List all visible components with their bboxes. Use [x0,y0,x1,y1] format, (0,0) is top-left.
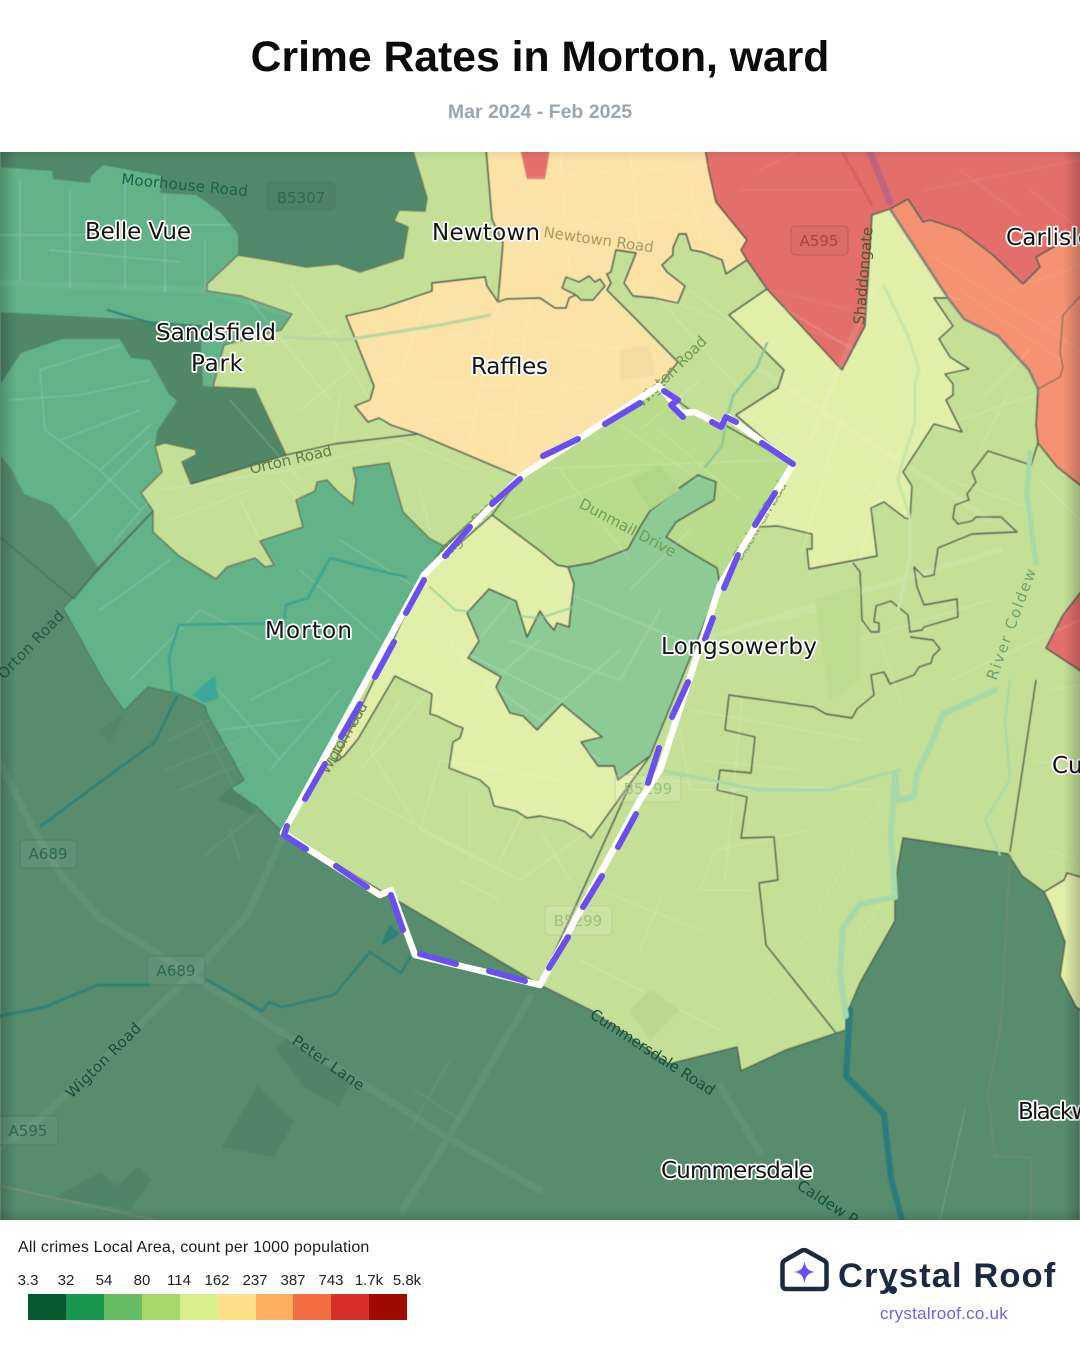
road names: Orton Road [248,441,334,478]
area polygons [0,148,1080,1224]
ward boundary: Morton [283,386,793,985]
place names: Sandsfield [156,320,276,346]
rivers and water [0,152,1038,1220]
area: ward centre mid green [467,475,720,780]
road shield: A689 west: A689 [29,845,67,863]
area: Belle Vue [0,165,292,387]
road shield: A689 central [147,956,205,985]
place names: Park [191,351,244,377]
logo wordmark: Crystal Roof [838,1257,1056,1295]
legend scale labels: 387 [280,1272,306,1289]
subtitle: date range: Mar 2024 - Feb 2025 [448,101,632,123]
small green island [562,276,605,300]
road names: Moorhouse Road [121,170,249,200]
legend scale labels [18,1272,422,1289]
area: city centre red [705,148,1080,370]
road names: Wigton Road [62,1019,145,1102]
legend scale labels: 32 [58,1272,74,1289]
road names: Shaddongate [850,226,877,325]
notch: red area top [520,148,550,179]
road names: Wigton Road [436,492,503,563]
internal boundaries [0,434,1038,1033]
legend scale labels: 114 [167,1272,191,1289]
area: pale yellow central [729,209,969,569]
area: west Morton [0,339,177,568]
road names: River Coldew [983,566,1040,682]
website link text: crystalroof.co.uk [880,1304,1008,1323]
darker land patches [55,345,860,1210]
legend scale labels: 3.3 [18,1272,38,1289]
legend scale labels: 1.7k [355,1272,383,1289]
place names: Belle Vue [85,219,191,245]
place names [85,219,1080,1184]
place names: Cummersdale [661,1158,813,1184]
legend scale labels: 5.8k [393,1272,421,1289]
road shield: A595 north [791,226,848,255]
place names: Raffles [471,354,548,380]
area: ward north [492,386,793,585]
icon: house with star [780,1248,829,1292]
road shield: B5299 north: B5299 [624,780,672,798]
road shield: A689 central: A689 [157,962,195,980]
road names: Cummersdale Road [587,1005,718,1099]
road names: Wigton Road [632,332,711,411]
logo y-tail dot [889,1286,897,1294]
legend title: All crimes Local Area, count per 1000 population [18,1239,369,1256]
road shield: B5307 [267,182,335,210]
road names [0,170,1040,1244]
place names: Newtown [432,220,540,246]
road shield: A689 west [20,840,77,868]
area: Newtown and Raffles [346,148,747,477]
road names: Newtown Road [542,223,655,256]
area: Sandsfield Park [141,148,520,579]
area: pale right edge [1044,873,1080,1012]
road shield: A595 south: A595 [9,1122,47,1140]
place names: Longsowerby [661,634,817,660]
legend colour bar [28,1294,407,1320]
red right edge [1046,588,1080,673]
area: ward pale [335,515,650,838]
area: orange [890,199,1080,488]
map edge shading [0,152,1080,1220]
road names: Peter Lane [289,1032,368,1094]
road names: Dunmail Drive [576,495,679,561]
title: Crime Rates in Morton, ward [251,33,829,81]
road shield: A595 south [0,1116,58,1145]
road shield: B5299 south [545,906,612,935]
legend scale labels: 54 [96,1272,112,1289]
legend scale labels: 162 [204,1272,230,1289]
legend scale labels: 80 [134,1272,150,1289]
place names: Morton [265,618,352,644]
legend scale labels: 237 [242,1272,268,1289]
road shield: B5307: B5307 [277,189,325,207]
area: north central light green [283,234,793,985]
road shield: B5299 north [615,775,681,802]
road names: Blackwell Road [729,478,791,564]
road shield: B5299 south: B5299 [554,912,602,930]
road names: Wigton Road [316,699,371,777]
logo: Crystal Roof [780,1248,1056,1295]
road shield: A595 north: A595 [800,232,838,250]
area: east green [540,296,1080,1071]
area: Morton [63,463,444,833]
legend scale labels: 743 [318,1272,344,1289]
road network [0,150,1080,1210]
